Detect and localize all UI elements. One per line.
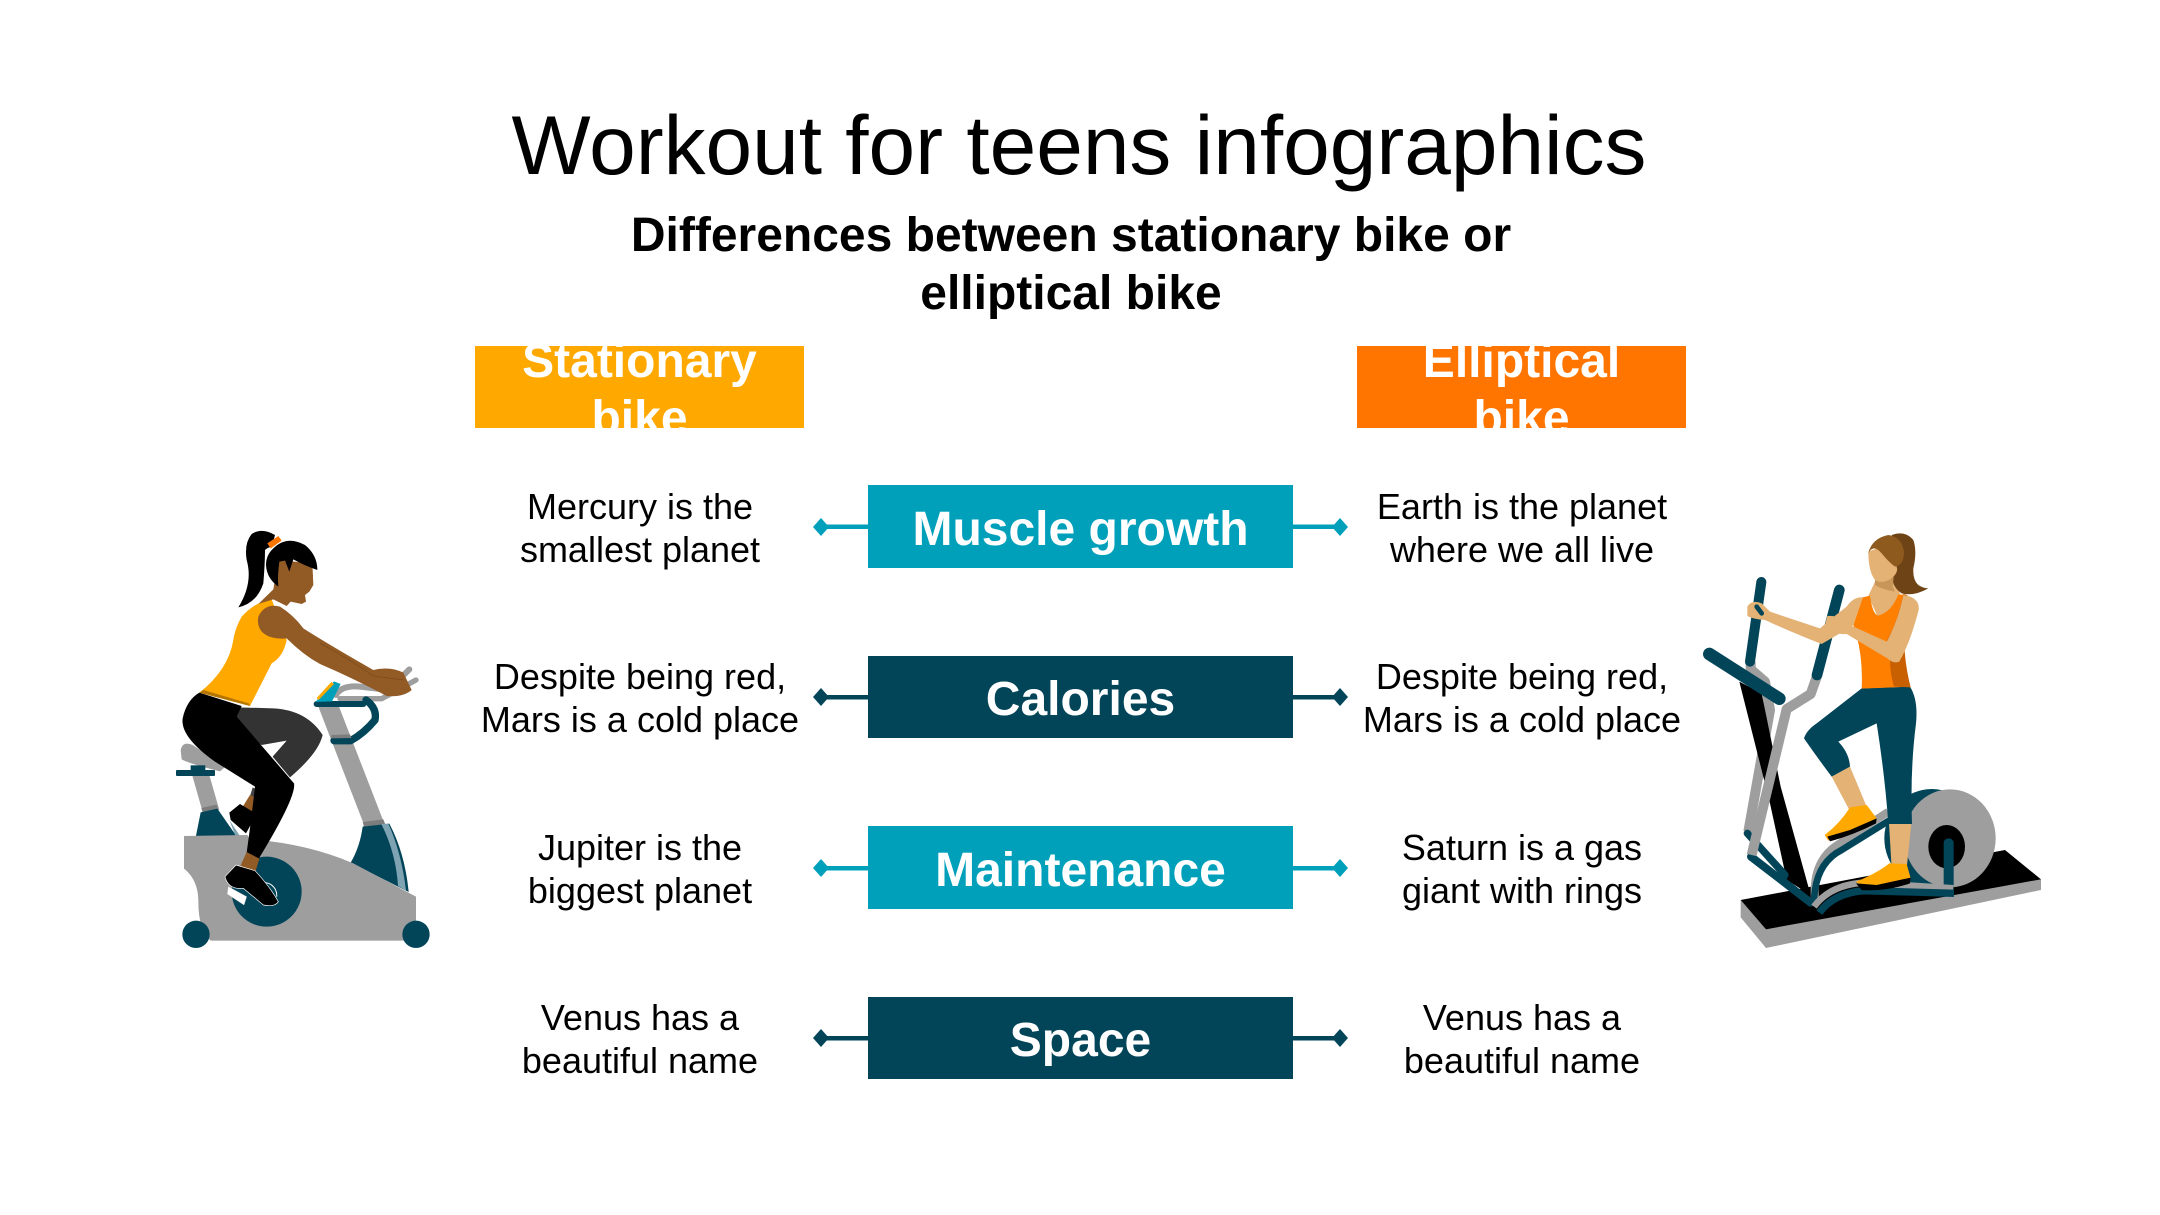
- elliptical text: maintenance: [1402, 827, 1642, 911]
- column header: stationary bike: [475, 346, 804, 428]
- torso top: [199, 599, 287, 706]
- row label: muscle growth: Muscle growth: [912, 502, 1249, 556]
- stationary text: space: Venus has a: [541, 997, 739, 1038]
- shoe upper: [1825, 805, 1877, 841]
- front grey rail: [1752, 676, 1817, 855]
- stationary text: maintenance: Jupiter is the: [538, 827, 742, 868]
- ponytail: [238, 531, 275, 607]
- platform: [1741, 879, 2041, 948]
- bike body: [184, 835, 416, 941]
- far arm: [1747, 597, 1863, 644]
- leggings: [1804, 687, 1917, 824]
- illustration: woman on stationary bike: [176, 530, 430, 948]
- near arm: [1825, 595, 1919, 662]
- elliptical text: calories: Mars is a cold place: [1363, 699, 1681, 740]
- elliptical text: muscle growth: where we all live: [1390, 529, 1654, 570]
- left handle: [1750, 582, 1761, 662]
- wheels: [182, 921, 210, 948]
- stationary text: muscle growth: [520, 486, 760, 570]
- stationary text: space: beautiful name: [522, 1040, 758, 1081]
- neck and face: [258, 560, 313, 606]
- elliptical text: calories: Despite being red,: [1376, 656, 1668, 697]
- row label: calories: [868, 656, 1293, 738]
- elliptical text: muscle growth: Earth is the planet: [1377, 486, 1667, 527]
- hair: [266, 541, 317, 587]
- tank top: [1853, 594, 1910, 689]
- shoe lower: [1856, 863, 1911, 888]
- hair top: [1868, 535, 1904, 567]
- stationary text: calories: [481, 656, 799, 740]
- subtitle: elliptical bike: [920, 267, 1222, 320]
- chest: [1868, 580, 1900, 618]
- front post: [318, 707, 384, 825]
- elliptical text: muscle growth: [1377, 486, 1667, 570]
- neck shadow: [1875, 573, 1895, 592]
- elliptical text: space: beautiful name: [1404, 1040, 1640, 1081]
- stationary text: maintenance: biggest planet: [528, 870, 752, 911]
- stationary text: muscle growth: smallest planet: [520, 529, 760, 570]
- rear grey rail: [1748, 662, 1770, 832]
- arm: [258, 606, 412, 696]
- row label: muscle growth: [868, 485, 1293, 568]
- stationary text: calories: Despite being red,: [494, 656, 786, 697]
- subtitle: [631, 209, 1511, 320]
- standing calf: [1889, 823, 1911, 868]
- face: [1868, 547, 1897, 582]
- crossbar: [1709, 654, 1779, 699]
- frame: [1739, 682, 1811, 895]
- console: [315, 681, 341, 702]
- stationary text: muscle growth: Mercury is the: [527, 486, 753, 527]
- elliptical text: calories: [1363, 656, 1681, 740]
- row label: maintenance: Maintenance: [935, 844, 1226, 896]
- far leg: [233, 707, 323, 777]
- illustration: woman on elliptical trainer: [1703, 533, 2041, 948]
- near leg: [182, 693, 294, 859]
- elliptical text: space: [1404, 997, 1640, 1081]
- row label: space: Space: [1010, 1014, 1151, 1067]
- lower leg back: [1832, 767, 1867, 810]
- row label: maintenance: [868, 826, 1293, 909]
- handlebars grey: [336, 669, 416, 699]
- subtitle: Differences between stationary bike or: [631, 209, 1511, 262]
- hair tie: [267, 536, 282, 548]
- hair back: [1892, 533, 1928, 594]
- flywheel: [1884, 789, 1979, 888]
- elliptical text: maintenance: giant with rings: [1402, 870, 1642, 911]
- row label: space: [868, 997, 1293, 1079]
- flywheel: [232, 857, 302, 927]
- curved rails: [1815, 812, 1888, 900]
- rear seat post: [192, 772, 219, 812]
- stationary text: space: [522, 997, 758, 1081]
- elliptical text: maintenance: Saturn is a gas: [1402, 827, 1642, 868]
- right handle: [1817, 590, 1839, 675]
- column header: elliptical bike: [1357, 346, 1686, 428]
- ankle and shoe: [239, 852, 259, 873]
- title: Workout for teens infographics: [512, 98, 1646, 192]
- lower arms: [1747, 833, 1785, 875]
- handlebar teal: [317, 695, 363, 713]
- saddle: [181, 744, 225, 771]
- stationary text: maintenance: [528, 827, 752, 911]
- stationary text: calories: Mars is a cold place: [481, 699, 799, 740]
- elliptical text: space: Venus has a: [1423, 997, 1621, 1038]
- row label: calories: Calories: [986, 673, 1175, 726]
